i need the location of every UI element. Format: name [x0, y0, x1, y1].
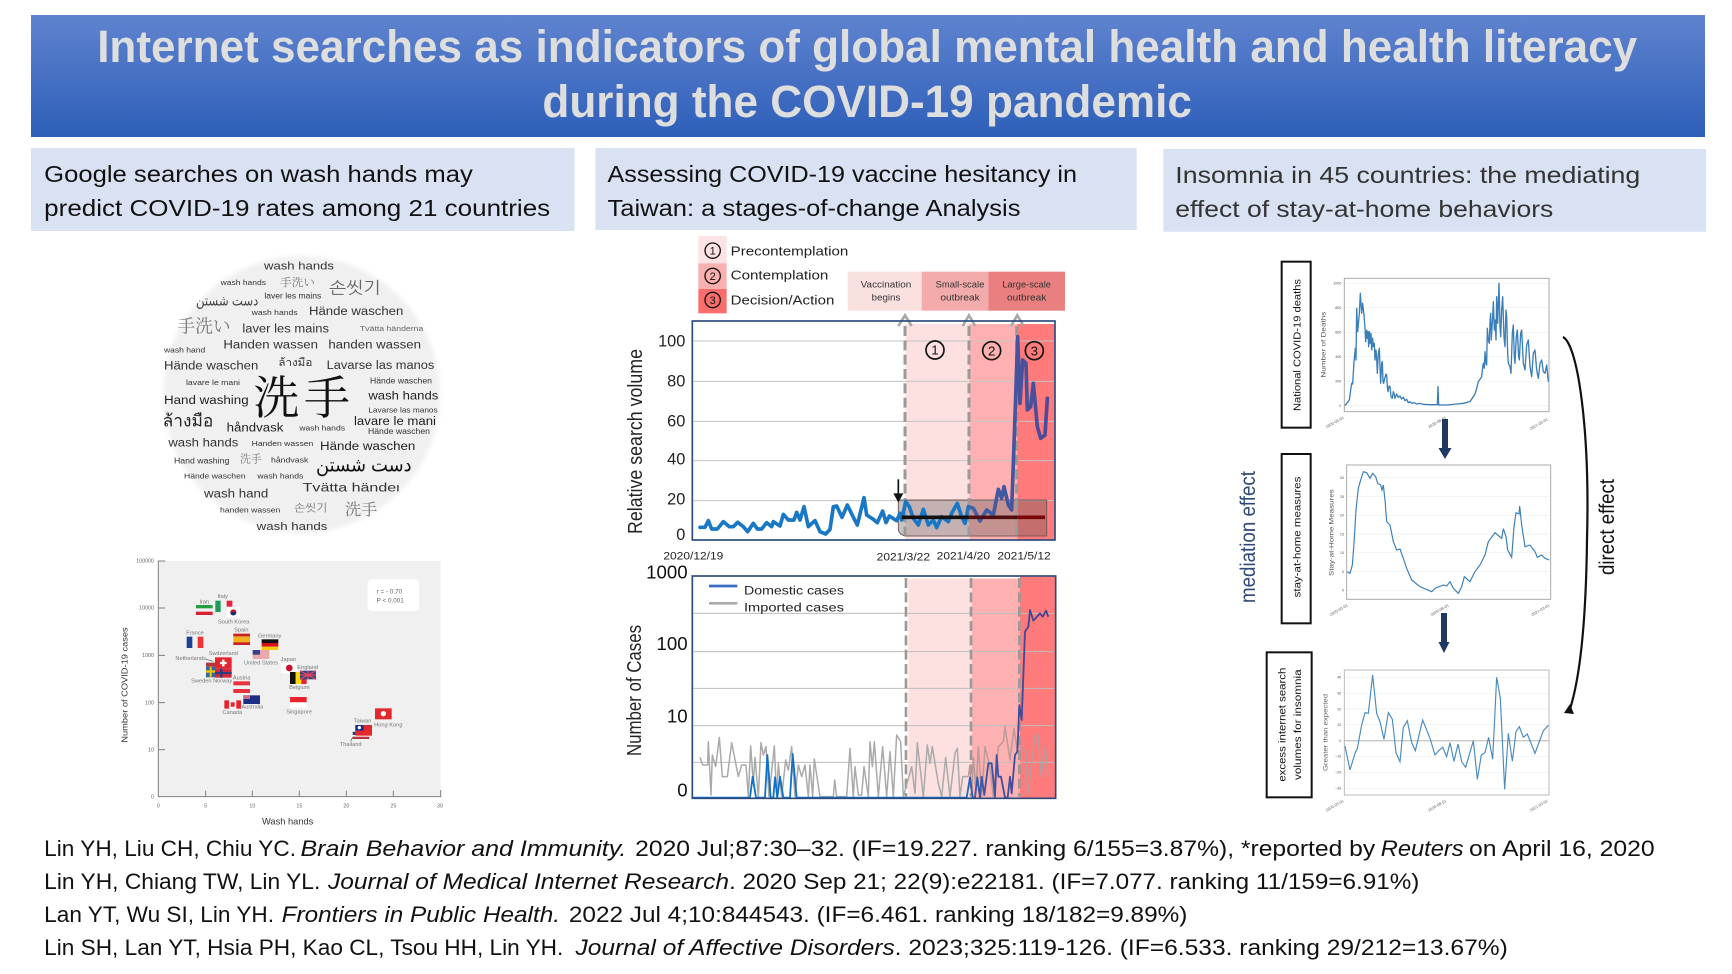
word cloud: wash hands in many languages: Lavarse las manos: [327, 358, 434, 372]
stage numbers: 1: [931, 343, 939, 358]
flag labels: Spain: [234, 628, 249, 634]
axis title: number of cases: Number of Cases: [624, 625, 646, 756]
chart: excess search volume: Greater than expected: [1323, 694, 1330, 771]
label: mediation effect: mediation effect: [1237, 471, 1260, 603]
reference 4: . 2023;325:119-126. (IF=6.533. ranking 29/212=13.67%): [895, 935, 1508, 960]
stage numbers: 3: [1031, 343, 1038, 358]
reference 1: Brain Behavior and Immunity.: [300, 836, 626, 861]
word cloud: wash hands in many languages: wash hand: [163, 346, 205, 355]
word cloud: wash hands in many languages: wash hands: [367, 389, 439, 402]
chart: excess search volume: 40: [1337, 676, 1341, 680]
panel heading: wash hands study: predict COVID-19 rates among 21 countries: [44, 195, 550, 221]
legend: stages of change: 2: [710, 271, 716, 283]
panel heading: vaccine hesitancy study: Taiwan: a stages-of-change Analysis: [608, 195, 1020, 221]
flag labels: Singapore: [286, 710, 312, 716]
y axis values: 0: [677, 780, 688, 801]
event labels: vaccination and outbreaks: [848, 272, 1065, 311]
reference 2: [44, 869, 1419, 894]
y axis title: Number of COVID-19 cases: [119, 627, 129, 743]
y axis values: 100: [657, 633, 688, 654]
word cloud: wash hands in many languages: دست شستن: [316, 456, 412, 477]
domestic cases line: [693, 610, 1048, 798]
scatter plot: wash hands vs COVID-19 cases with country flags: 20: [343, 803, 349, 809]
panel heading: vaccine hesitancy study: [595, 148, 1137, 230]
chart: number of deaths: 200: [1335, 380, 1341, 384]
legend: domestic and imported: Domestic cases: [744, 584, 844, 598]
word cloud: wash hands in many languages: Hand washing: [174, 456, 229, 465]
dashed stage markers: [906, 578, 1019, 797]
date labels: 2020/12/19: [663, 550, 723, 562]
word cloud: wash hands in many languages: 手洗い: [280, 275, 315, 290]
scatter plot: wash hands vs COVID-19 cases with country flags: 10000: [139, 606, 154, 612]
chart: excess search volume: [1323, 670, 1550, 813]
chart: excess search volume: 2020-03-01: [1325, 798, 1346, 813]
chart: stay-at-home measures: Stay-at-Home Measures: [1329, 489, 1336, 576]
box: excess internet search volumes: volumes for insomnia: [1293, 669, 1304, 780]
title banner: [31, 15, 1705, 137]
chart: number of deaths: 600: [1335, 331, 1341, 335]
panel heading: insomnia study: [1163, 149, 1706, 232]
scatter plot: wash hands vs COVID-19 cases with country flags: 100: [145, 700, 154, 706]
panel heading: insomnia study: effect of stay-at-home behaviors: [1175, 196, 1553, 222]
flag labels: Japan: [281, 657, 296, 663]
reference 2: Journal of Medical Internet Research: [327, 869, 729, 894]
word cloud: wash hands in many languages: Hände waschen: [370, 376, 432, 385]
reference 1: [44, 836, 1655, 861]
word cloud: wash hands in many languages: Handen wassen: [223, 337, 318, 351]
word cloud: wash hands in many languages: [163, 256, 440, 533]
chart: stay-at-home measures: 30: [1340, 476, 1344, 480]
chart: stay-at-home measures: 2021-03-01: [1530, 602, 1551, 617]
word cloud: wash hands in many languages: laver les mains: [264, 291, 321, 300]
box: stay-at-home measures: [1282, 454, 1311, 623]
chart: excess search volume: 2020-08-01: [1427, 798, 1448, 813]
word cloud: wash hands in many languages: ล้างมือ: [163, 412, 213, 431]
word cloud: wash hands in many languages: wash hands: [255, 521, 328, 533]
word cloud: wash hands in many languages: 手洗い: [177, 313, 231, 339]
reference 3: Lan YT, Wu SI, Lin YH.: [44, 902, 274, 927]
flag labels: United States: [244, 661, 278, 667]
chart: number of deaths: 0: [1339, 404, 1341, 408]
up arrows to event labels: [898, 315, 1024, 326]
reference 1: 2020 Jul;87:30–32. (IF=19.227. ranking 6/155=3.87%), *reported by: [635, 836, 1375, 861]
y axis values: 20: [667, 490, 685, 508]
reference 3: [44, 902, 1187, 927]
word cloud: wash hands in many languages: håndvask: [271, 456, 309, 465]
scatter plot: wash hands vs COVID-19 cases with country flags: 0: [151, 795, 154, 801]
legend: stages of change: 1: [710, 246, 716, 258]
chart: stay-at-home measures: 2020-08-01: [1430, 602, 1451, 617]
word cloud: wash hands in many languages: ล้างมือ: [278, 356, 312, 369]
chart: excess search volume: 0: [1339, 739, 1341, 743]
word cloud: wash hands in many languages: دست شستن: [196, 293, 258, 310]
box: stay-at-home measures: stay-at-home measures: [1293, 477, 1304, 597]
reference 1: Lin YH, Liu CH, Chiu YC.: [44, 836, 296, 861]
dashed stage markers: [905, 326, 1017, 535]
flag labels: Germany: [258, 633, 281, 639]
chart: excess search volume: 2021-03-01: [1529, 798, 1550, 813]
scatter plot: wash hands vs COVID-19 cases with country flags: 10: [148, 747, 154, 753]
date labels: 2021/5/12: [997, 550, 1051, 562]
flag labels: Taiwan: [354, 719, 371, 725]
reference 1: Reuters: [1381, 836, 1464, 861]
line chart: relative search volume: [658, 315, 1055, 564]
y axis values: 40: [667, 451, 685, 469]
reference 2: . 2020 Sep 21; 22(9):e22181. (IF=7.077. ranking 11/159=6.91%): [729, 869, 1419, 894]
date labels: 2021/3/22: [877, 552, 930, 564]
y axis values: [658, 333, 685, 544]
box: National COVID-19 deaths: National COVID-19 deaths: [1293, 279, 1304, 411]
reference 1: on April 16, 2020: [1469, 836, 1655, 861]
flag labels: Thailand: [340, 742, 362, 748]
chart: number of deaths: 1000: [1333, 282, 1341, 286]
box: excess internet search volumes: excess internet search: [1277, 667, 1288, 782]
flag labels: Australia: [241, 704, 264, 710]
legend: stages of change: Precontemplation: [731, 245, 848, 259]
legend: stages of change: Contemplation: [731, 268, 828, 282]
scatter plot: wash hands vs COVID-19 cases with country flags: 15: [296, 803, 302, 809]
box: National COVID-19 deaths: [1282, 262, 1311, 428]
search volume line: [700, 337, 1047, 534]
scatter plot: wash hands vs COVID-19 cases with country flags: 100000: [136, 558, 154, 564]
chart: number of deaths: 2020-08-01: [1427, 414, 1448, 429]
word cloud: wash hands in many languages: Handen wassen: [252, 439, 313, 448]
date labels: [663, 550, 1051, 564]
correlation box: [368, 579, 419, 611]
chart: stay-at-home measures: 5: [1342, 570, 1344, 574]
word cloud: wash hands in many languages: wash hands: [298, 424, 345, 433]
word cloud: wash hands in many languages: wash hands: [167, 437, 239, 450]
baseline shaded box: [898, 500, 1047, 536]
word cloud: wash hands in many languages: 洗手: [253, 362, 350, 428]
flag labels: South Korea: [218, 619, 250, 625]
chart: number of deaths: 2021-03-01: [1529, 416, 1550, 431]
arrow: stay-at-home to insomnia: [1438, 613, 1450, 653]
word cloud: wash hands in many languages: håndvask: [227, 421, 284, 435]
chart: number of deaths: 2020-03-01: [1325, 414, 1346, 429]
y axis values: 0: [676, 526, 685, 544]
reference 3: 2022 Jul 4;10:844543. (IF=6.461. ranking 18/182=9.89%): [569, 902, 1187, 927]
panel heading: insomnia study: Insomnia in 45 countries: the mediating: [1175, 162, 1640, 188]
correlation box: r = - 0.70: [377, 589, 403, 596]
chart: stay-at-home measures: 25: [1340, 495, 1344, 499]
reference 3: Frontiers in Public Health.: [282, 902, 560, 927]
word cloud: wash hands in many languages: Tvätta händerna: [360, 324, 424, 333]
baseline mean line: [902, 512, 1045, 523]
chart: excess search volume: −30: [1335, 787, 1341, 791]
reference 4: Journal of Affective Disorders: [574, 935, 895, 960]
chart: stay-at-home measures: 0: [1342, 589, 1344, 593]
chart: excess search volume: −20: [1335, 771, 1341, 775]
word cloud: wash hands in many languages: wash hand: [203, 486, 268, 500]
word cloud: wash hands in many languages: Hände waschen: [184, 472, 246, 481]
chart: excess search volume: −10: [1335, 755, 1341, 759]
panel heading: vaccine hesitancy study: Assessing COVID-19 vaccine hesitancy in: [608, 161, 1077, 187]
event labels: vaccination and outbreaks: Vaccination: [861, 280, 911, 290]
y axis values: [646, 561, 688, 801]
scatter plot: wash hands vs COVID-19 cases with country flags: 1000: [142, 653, 154, 659]
scatter plot: wash hands vs COVID-19 cases with country flags: 30: [437, 803, 443, 809]
word cloud: wash hands in many languages: Tvätta händerna: [303, 481, 419, 495]
word cloud: wash hands in many languages: laver les mains: [242, 321, 329, 335]
legend: stages of change: 3: [710, 295, 716, 307]
imported cases line: [700, 735, 968, 797]
scatter plot: wash hands vs COVID-19 cases with country flags: 5: [204, 803, 207, 809]
x axis title: Wash hands: [262, 816, 314, 826]
word cloud: wash hands in many languages: 손씻기: [294, 503, 327, 514]
scatter plot: wash hands vs COVID-19 cases with country flags: 10: [249, 803, 255, 809]
chart: excess search volume: 20: [1337, 707, 1341, 711]
word cloud: wash hands in many languages: handen wassen: [328, 337, 421, 351]
stage bands: [906, 324, 1055, 540]
references: [44, 836, 1655, 960]
legend: domestic and imported: [709, 584, 844, 615]
word cloud: wash hands in many languages: Hände waschen: [164, 358, 258, 372]
event labels: vaccination and outbreaks: outbreak: [940, 293, 980, 303]
word cloud: wash hands in many languages: Hände waschen: [309, 304, 403, 318]
panel heading: wash hands study: [31, 148, 574, 231]
chart: number of deaths: [1320, 278, 1550, 431]
y axis values: 80: [667, 373, 685, 391]
stage numbers: 2: [988, 343, 995, 358]
flag labels: Switzerland: [209, 651, 238, 657]
date labels: 2021/4/20: [937, 550, 990, 562]
word cloud: wash hands in many languages: 洗手: [240, 452, 262, 467]
flag labels: France: [186, 630, 204, 636]
word cloud: wash hands in many languages: lavare le mani: [186, 378, 240, 387]
y axis values: 1000: [646, 561, 688, 582]
word cloud: wash hands in many languages: 洗手: [345, 497, 377, 520]
chart: number of deaths: 400: [1335, 355, 1341, 359]
reference 4: Lin SH, Lan YT, Hsia PH, Kao CL, Tsou HH, Lin YH.: [44, 935, 563, 960]
word cloud: wash hands in many languages: wash hands: [263, 260, 334, 272]
black arrow: [893, 479, 903, 503]
label: direct effect: direct effect: [1596, 479, 1619, 575]
flag labels: England: [297, 665, 318, 671]
chart: stay-at-home measures: 20: [1340, 514, 1344, 518]
event labels: vaccination and outbreaks: begins: [872, 293, 901, 303]
legend: domestic and imported: Imported cases: [744, 601, 844, 615]
event labels: vaccination and outbreaks: Small-scale: [936, 280, 984, 290]
line chart: number of cases: [646, 561, 1056, 801]
chart: stay-at-home measures: 15: [1340, 532, 1344, 536]
y axis values: 100: [658, 333, 685, 351]
word cloud: wash hands in many languages: Hände waschen: [368, 427, 430, 436]
event labels: vaccination and outbreaks: outbreak: [1007, 293, 1047, 303]
flag labels: Italy: [217, 594, 228, 600]
flag labels: Canada: [222, 710, 243, 716]
flag labels: Austria: [233, 676, 251, 682]
flag labels: Hong Kong: [374, 723, 402, 729]
word cloud: wash hands in many languages: Hände waschen: [320, 439, 415, 453]
flag labels: Iran: [199, 599, 209, 605]
flag labels: Belgium: [289, 685, 310, 691]
word cloud: wash hands in many languages: wash hands: [251, 308, 298, 317]
legend: stages of change: [698, 236, 848, 313]
word cloud: wash hands in many languages: wash hands: [220, 278, 266, 287]
flag labels: Sweden Norway: [191, 678, 232, 684]
stage numbers: [926, 341, 1043, 360]
chart: excess search volume: 10: [1337, 723, 1341, 727]
word cloud: wash hands in many languages: lavare le mani: [354, 414, 436, 428]
direct effect curved arrow: [1563, 337, 1587, 714]
stage bands: [908, 577, 1055, 798]
word cloud: wash hands in many languages: wash hands: [256, 472, 304, 481]
legend: stages of change: Decision/Action: [731, 294, 834, 308]
word cloud: wash hands in many languages: Hand washing: [164, 393, 249, 407]
chart: number of deaths: 800: [1335, 306, 1341, 310]
chart: number of deaths: Number of Deaths: [1320, 311, 1327, 378]
panel heading: wash hands study: Google searches on wash hands may: [44, 161, 473, 187]
reference 2: Lin YH, Chiang TW, Lin YL.: [44, 869, 320, 894]
box: excess internet search volumes: [1267, 652, 1312, 797]
y axis values: 60: [667, 413, 685, 431]
flag labels: [175, 594, 402, 748]
title banner: during the COVID-19 pandemic: [542, 76, 1192, 127]
scatter plot: wash hands vs COVID-19 cases with country flags: [119, 558, 443, 826]
chart: stay-at-home measures: 10: [1340, 551, 1344, 555]
title banner: Internet searches as indicators of global mental health and health literacy: [97, 21, 1637, 72]
scatter plot: wash hands vs COVID-19 cases with country flags: 25: [390, 803, 396, 809]
correlation box: P < 0.001: [377, 598, 404, 605]
chart: stay-at-home measures: 2020-03-01: [1329, 602, 1350, 617]
y axis values: 10: [667, 706, 688, 727]
chart: stay-at-home measures: [1329, 465, 1551, 617]
axis title: relative search volume: Relative search volume: [625, 349, 647, 534]
event labels: vaccination and outbreaks: Large-scale: [1002, 280, 1051, 290]
flag labels: Netherlands: [175, 656, 206, 662]
country flags: [187, 601, 392, 741]
arrow: deaths to stay-at-home: [1438, 419, 1452, 459]
word cloud: wash hands in many languages: handen wassen: [220, 506, 280, 515]
scatter plot: wash hands vs COVID-19 cases with country flags: 0: [157, 803, 160, 809]
chart: excess search volume: 30: [1337, 692, 1341, 696]
reference 4: [44, 935, 1508, 960]
word cloud: wash hands in many languages: Lavarse las manos: [368, 405, 438, 414]
word cloud: wash hands in many languages: 손씻기: [329, 279, 381, 296]
